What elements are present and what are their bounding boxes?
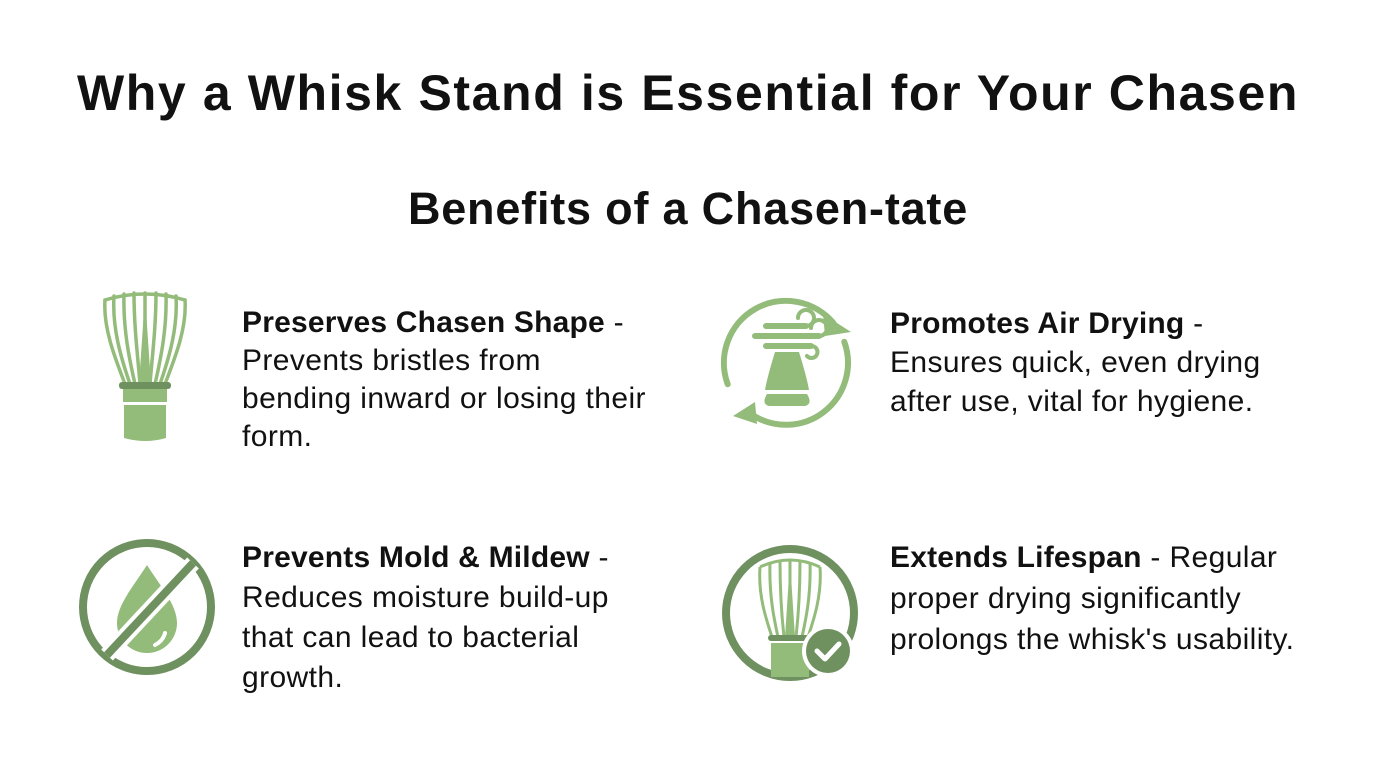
title: Why a Whisk Stand is Essential for Your Chasen: [77, 65, 1299, 121]
text: air drying: Ensures quick, even drying: [890, 346, 1261, 379]
text: mold: Reduces moisture build-up: [242, 581, 609, 614]
text: preserves shape: form.: [242, 420, 312, 453]
text: mold: that can lead to bacterial: [242, 621, 579, 654]
text: air drying: after use, vital for hygiene.: [890, 385, 1253, 418]
text: lifespan: Extends Lifespan - Regular: [890, 541, 1277, 574]
subtitle: Benefits of a Chasen-tate: [408, 183, 968, 234]
text: preserves shape: Preserves Chasen Shape -: [242, 306, 624, 339]
text: mold: growth.: [242, 661, 343, 694]
text: mold: Prevents Mold & Mildew -: [242, 541, 609, 574]
icon: lifespan: [722, 545, 858, 681]
icon: whisk: [103, 291, 187, 441]
text: preserves shape: [242, 306, 646, 453]
text: lifespan: [890, 541, 1294, 656]
text: lifespan: prolongs the whisk's usability.: [890, 623, 1294, 656]
text: lifespan: proper drying significantly: [890, 582, 1241, 615]
text: preserves shape: bending inward or losing their: [242, 382, 646, 415]
text: mold: [242, 541, 609, 694]
text: preserves shape: Prevents bristles from: [242, 344, 541, 377]
text: air drying: [890, 307, 1261, 418]
text: air drying: Promotes Air Drying -: [890, 307, 1204, 340]
icon: air drying: [720, 298, 852, 428]
icon: no mold: [79, 539, 215, 675]
